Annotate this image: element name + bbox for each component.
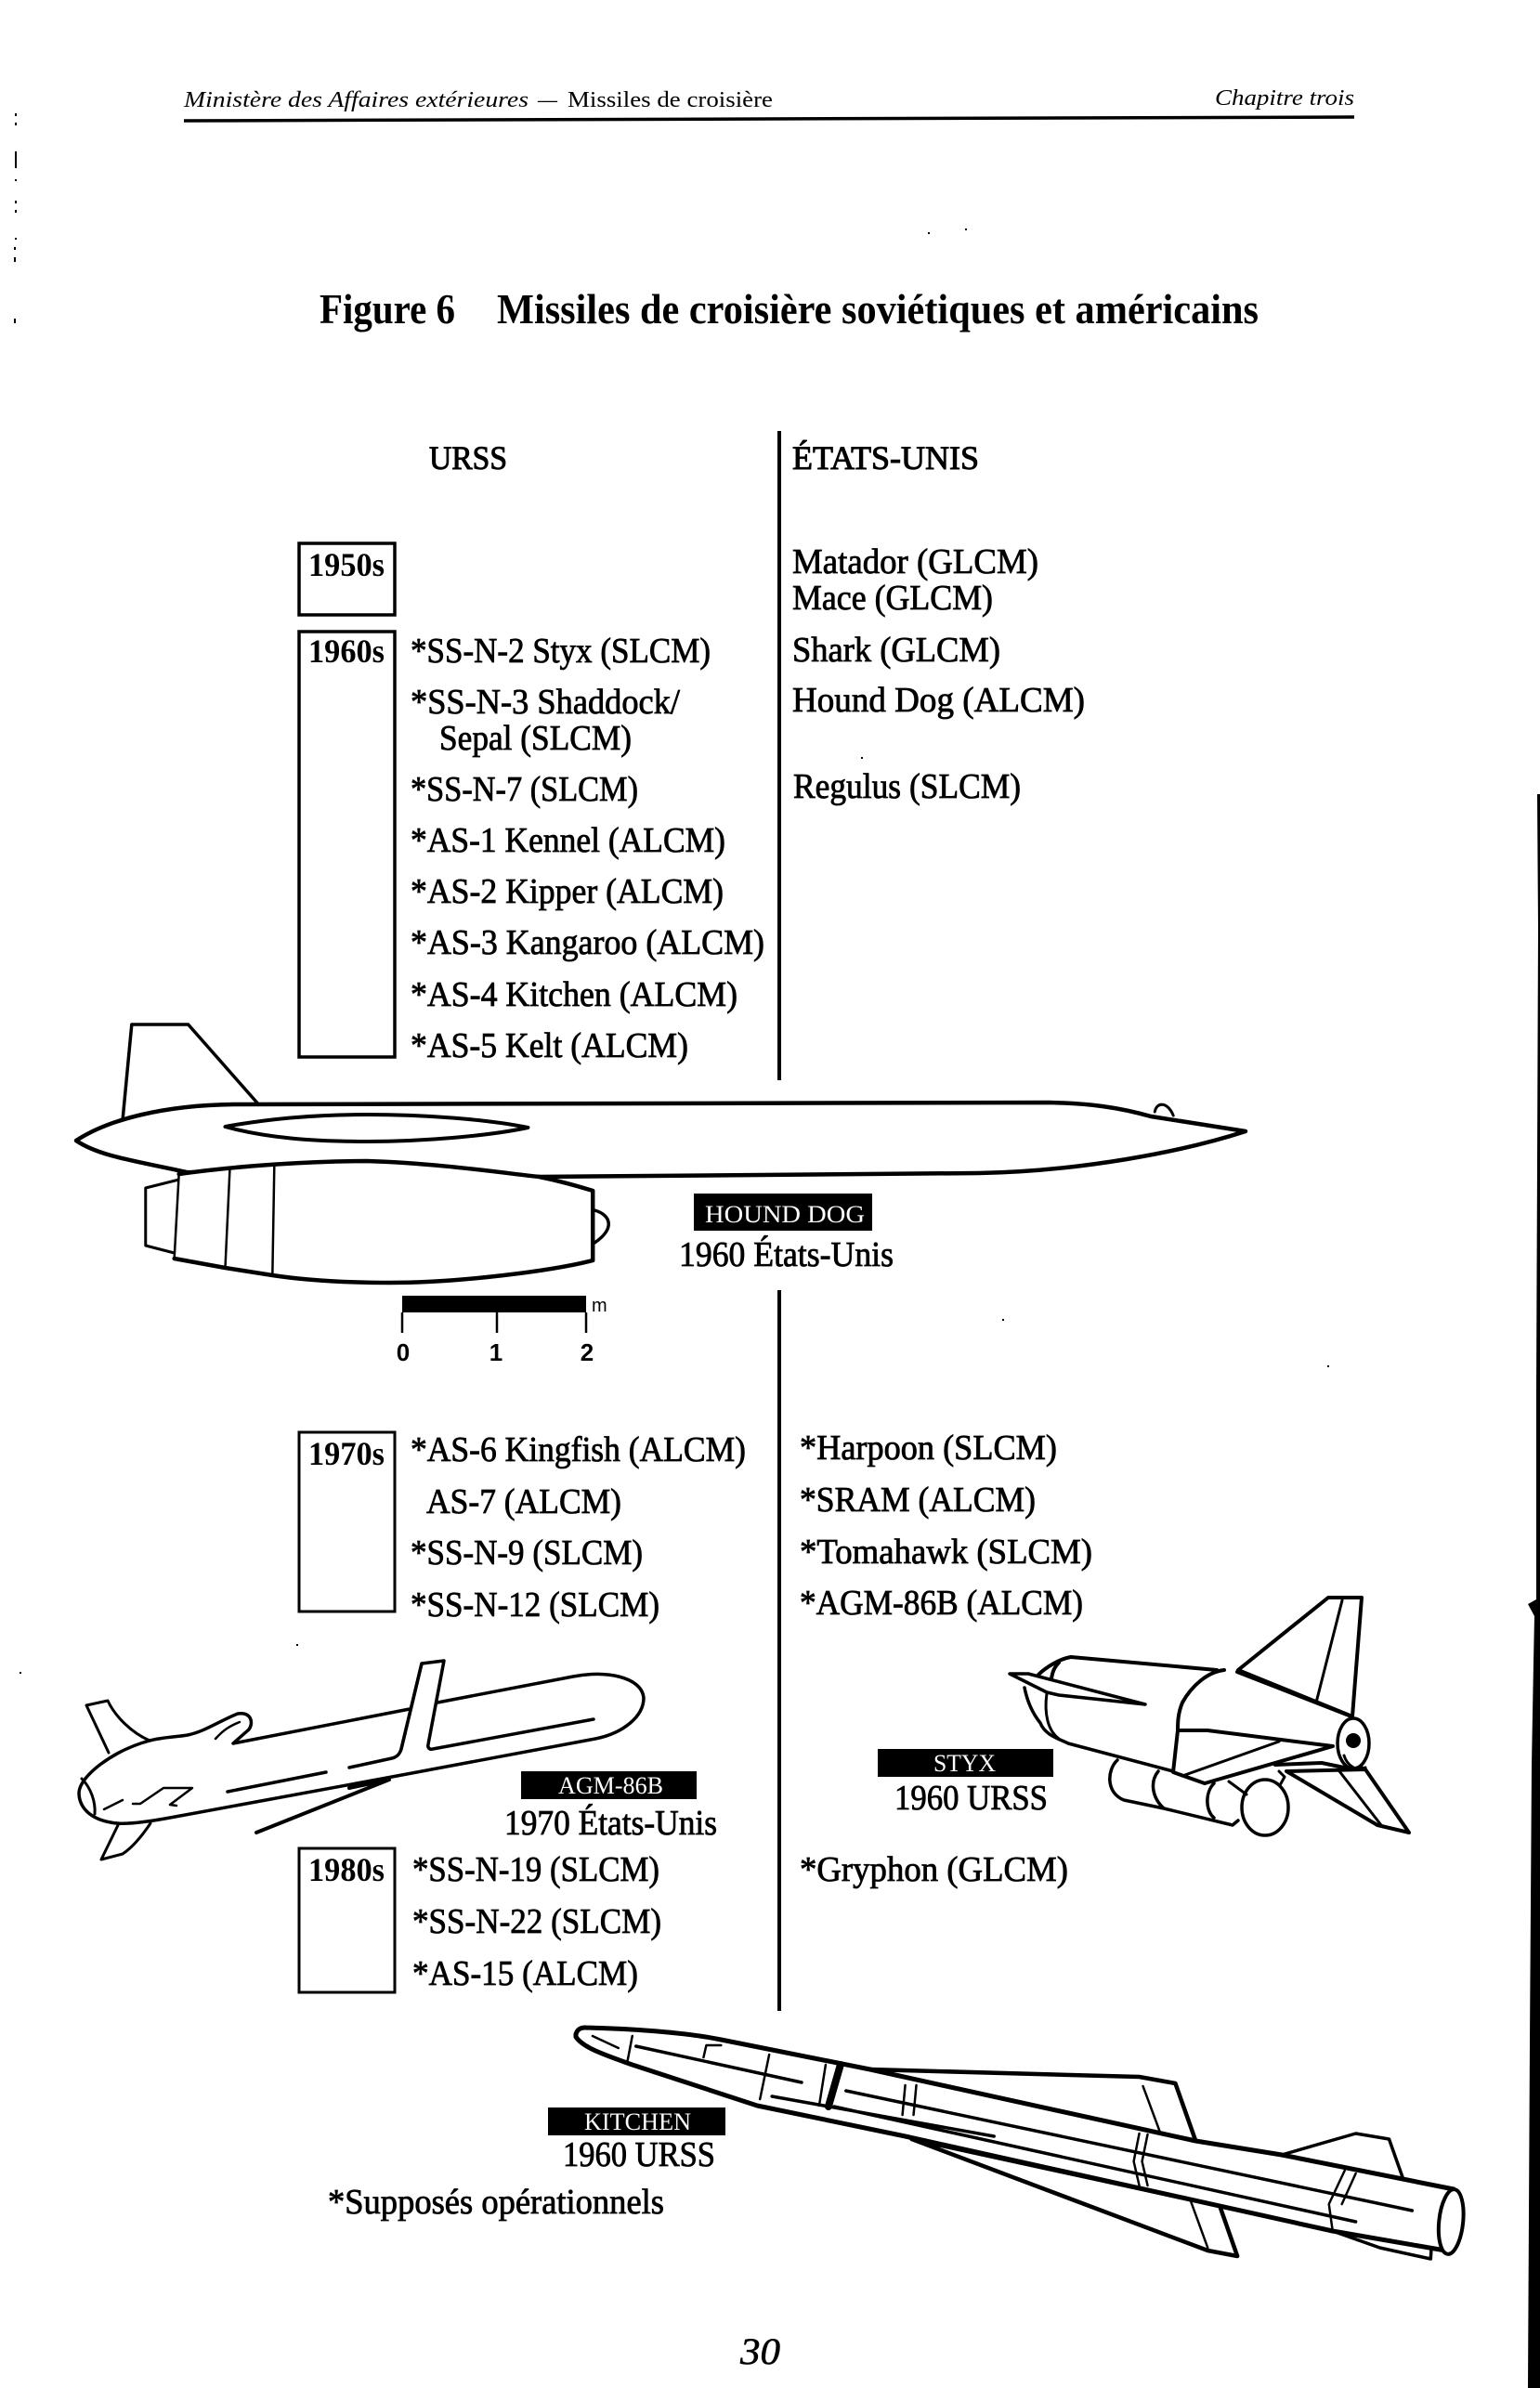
timeline divider upper xyxy=(777,431,781,1080)
decade box: 1950s: 1950s xyxy=(308,546,385,583)
decade box: 1960s xyxy=(299,632,395,1057)
column heading: URSS: URSS xyxy=(429,439,507,476)
missile illustration: Kitchen xyxy=(576,2028,1467,2259)
list: États-Unis 1970s: *SRAM (ALCM) xyxy=(800,1481,1036,1520)
list: États-Unis 1970s: *Tomahawk (SLCM) xyxy=(800,1533,1092,1572)
right page edge shadow xyxy=(1528,794,1540,2388)
list: URSS 1980s xyxy=(412,1850,661,1993)
list: URSS 1980s: *AS-15 (ALCM) xyxy=(412,1954,638,1993)
list: URSS 1970s: *SS-N-9 (SLCM) xyxy=(411,1533,643,1572)
list: URSS 1960s: *SS-N-2 Styx (SLCM) xyxy=(411,632,711,671)
decade box: 1960s: 1960s xyxy=(308,633,385,670)
label: AGM-86B: 1970 États-Unis xyxy=(504,1804,717,1843)
list: URSS 1960s: *SS-N-7 (SLCM) xyxy=(411,770,638,809)
running header xyxy=(183,86,1354,121)
label: Styx: STYX xyxy=(933,1750,996,1777)
label: Hound Dog: HOUND DOG xyxy=(705,1201,865,1228)
label: Hound Dog: 1960 États-Unis xyxy=(679,1235,894,1274)
list: États-Unis 1950s-1960s: Regulus (SLCM) xyxy=(793,767,1021,806)
list: URSS 1970s: *SS-N-12 (SLCM) xyxy=(411,1585,659,1625)
decade box: 1980s: 1980s xyxy=(308,1851,385,1888)
list: URSS 1960s: *AS-5 Kelt (ALCM) xyxy=(411,1026,688,1065)
list: URSS 1970s xyxy=(411,1430,746,1625)
label: Hound Dog xyxy=(679,1194,894,1274)
list: États-Unis 1950s-1960s xyxy=(792,542,1085,806)
list: URSS 1960s: Sepal (SLCM) xyxy=(439,719,632,758)
list: URSS 1960s: *AS-3 Kangaroo (ALCM) xyxy=(411,923,764,962)
list: États-Unis 1970s xyxy=(800,1429,1092,1623)
title: Missiles de croisière soviétiques et américains xyxy=(497,285,1259,333)
decade box: 1980s xyxy=(299,1848,395,1992)
list: États-Unis 1950s-1960s: Shark (GLCM) xyxy=(792,631,1000,670)
scale bar: m xyxy=(592,1296,607,1316)
running header: — xyxy=(537,88,558,112)
label: AGM-86B xyxy=(504,1771,717,1843)
label: Styx xyxy=(878,1749,1053,1818)
label: Kitchen xyxy=(548,2107,725,2174)
list: URSS 1980s: *SS-N-19 (SLCM) xyxy=(412,1850,659,1889)
footnote: *Supposés opérationnels xyxy=(328,2183,664,2222)
list: URSS 1960s: *AS-2 Kipper (ALCM) xyxy=(411,872,724,911)
timeline divider lower xyxy=(777,1290,781,2011)
running header: Missiles de croisière xyxy=(568,88,773,112)
scale bar: 2 xyxy=(581,1338,594,1366)
decade box: 1950s xyxy=(299,543,395,615)
scale bar xyxy=(397,1296,607,1366)
scale bar: 1 xyxy=(489,1338,502,1366)
list: États-Unis 1970s: *Harpoon (SLCM) xyxy=(800,1429,1057,1468)
list: États-Unis 1950s-1960s: Mace (GLCM) xyxy=(792,579,993,618)
column heading: États-Unis: ÉTATS-UNIS xyxy=(792,439,979,476)
list: URSS 1970s: *AS-6 Kingfish (ALCM) xyxy=(411,1430,746,1469)
page number: 30 xyxy=(739,2330,780,2372)
running header: Ministère des Affaires extérieures xyxy=(183,88,529,112)
list: États-Unis 1950s-1960s: Hound Dog (ALCM) xyxy=(792,681,1085,720)
decade box: 1970s xyxy=(299,1432,395,1612)
list: URSS 1980s: *SS-N-22 (SLCM) xyxy=(412,1902,661,1941)
list: États-Unis 1950s-1960s: Matador (GLCM) xyxy=(792,542,1038,581)
decade box: 1970s: 1970s xyxy=(308,1435,385,1472)
list: URSS 1970s: AS-7 (ALCM) xyxy=(426,1482,621,1521)
list: URSS 1960s: *AS-4 Kitchen (ALCM) xyxy=(411,975,737,1014)
label: Kitchen: KITCHEN xyxy=(584,2108,691,2135)
missile illustration: Hound Dog xyxy=(76,1024,1246,1283)
running header: Chapitre trois xyxy=(1215,86,1354,111)
list: URSS 1960s: *SS-N-3 Shaddock/ xyxy=(411,683,680,722)
list: URSS 1960s: *AS-1 Kennel (ALCM) xyxy=(411,821,725,860)
scale bar: 0 xyxy=(397,1338,410,1366)
missile illustration: AGM-86B xyxy=(79,1661,644,1860)
list: URSS 1960s xyxy=(411,632,764,1065)
missile illustration: Styx xyxy=(1010,1598,1409,1835)
list: États-Unis 1970s: *AGM-86B (ALCM) xyxy=(800,1584,1083,1623)
label: Styx: 1960 URSS xyxy=(894,1779,1048,1818)
label: Kitchen: 1960 URSS xyxy=(563,2135,715,2174)
title: Figure 6 xyxy=(320,285,455,333)
list: États-Unis 1980s: *Gryphon (GLCM) xyxy=(800,1850,1068,1889)
label: AGM-86B: AGM-86B xyxy=(558,1772,663,1799)
